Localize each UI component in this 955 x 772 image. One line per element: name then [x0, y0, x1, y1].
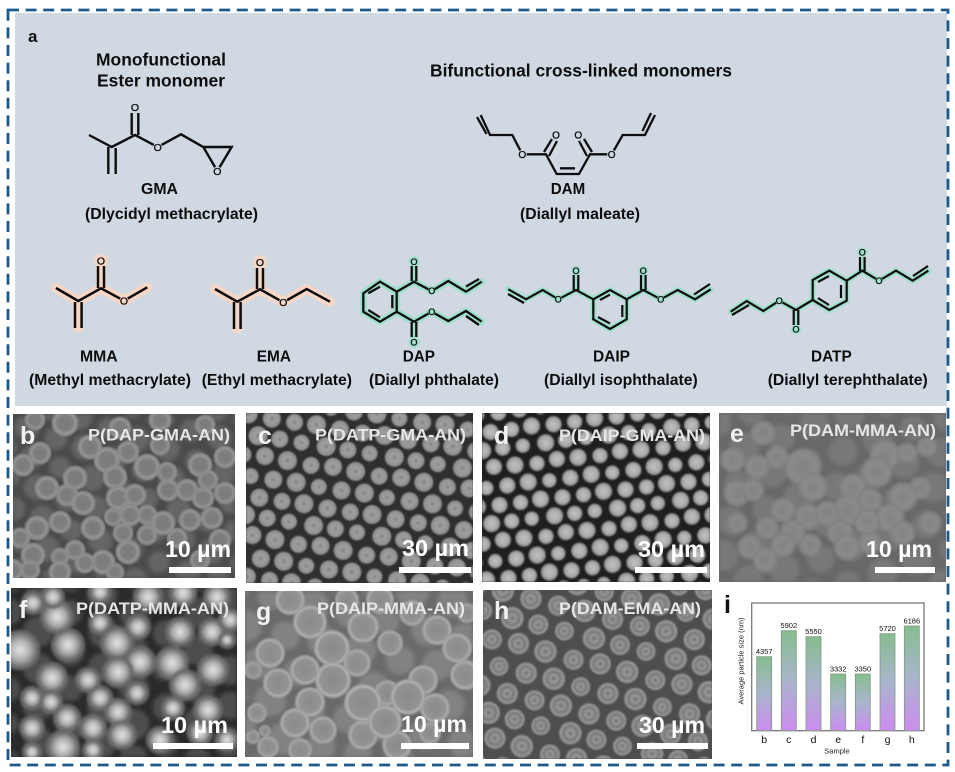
sample name d: P(DAIP-GMA-AN) — [559, 426, 705, 445]
label: DAP: (Diallyl phthalate) — [369, 372, 499, 389]
sample name g: P(DAIP-MMA-AN) — [317, 599, 465, 618]
structure: DAP — [363, 256, 482, 348]
structure: DAIP: O — [555, 294, 562, 304]
panel letter g: g — [256, 598, 271, 626]
heading: monofunctional ester monomer: Monofunctional — [96, 50, 226, 70]
label: GMA: (Dlycidyl methacrylate) — [85, 206, 258, 223]
structure: EMA — [215, 255, 330, 329]
panel letter i: i — [724, 591, 731, 619]
panel h: SEM P(DAM-EMA-AN) — [483, 590, 712, 759]
bars — [757, 626, 919, 731]
sample name h: P(DAM-EMA-AN) — [559, 599, 701, 618]
structure: DAP: O — [428, 286, 435, 296]
x axis ticks: d — [811, 734, 817, 746]
structure: DAP: O — [428, 307, 435, 317]
structure: DAIP: O — [640, 266, 647, 276]
scale bar e — [866, 536, 935, 573]
structure: DATP: O — [875, 276, 883, 286]
structure: GMA: O — [131, 102, 139, 114]
label: MMA: (Methyl methacrylate) — [29, 372, 191, 389]
bar values: 3350 — [854, 664, 871, 674]
label: DATP: DATP — [811, 348, 852, 366]
panel e: SEM P(DAM-MMA-AN) — [719, 413, 946, 582]
y axis title: Average particle size (nm) — [736, 617, 746, 704]
label: DAP: DAP — [403, 348, 435, 366]
structure: DAIP — [508, 266, 711, 329]
label: EMA — [202, 348, 352, 389]
label: GMA — [85, 181, 258, 223]
x axis ticks: g — [885, 734, 891, 746]
bar values: 3332 — [830, 664, 847, 674]
label: DATP — [768, 348, 928, 389]
bar values: 4357 — [756, 647, 773, 656]
scale bar c — [399, 535, 471, 573]
scale bar d: 30 µm — [638, 536, 705, 562]
label: MMA — [29, 348, 191, 389]
label: DAM: (Diallyl maleate) — [520, 206, 640, 223]
panel f: SEM P(DATP-MMA-AN) — [2, 581, 240, 762]
label: MMA: MMA — [80, 348, 118, 366]
structure: EMA: O — [279, 297, 287, 309]
scale bar f: 10 µm — [161, 712, 228, 738]
structure: DAM: O — [552, 130, 560, 142]
x axis ticks: b — [761, 734, 767, 746]
label: DAM: DAM — [551, 181, 585, 198]
heading: bifunctional cross-linked monomers: Bifunctional cross-linked monomers — [430, 60, 732, 80]
structure: DAIP: O — [657, 294, 664, 304]
sample name b: P(DAP-GMA-AN) — [88, 426, 230, 444]
scale bar h: 30 µm — [639, 712, 705, 738]
structure: GMA: O — [213, 166, 221, 178]
scale bar g — [401, 711, 469, 749]
scale bar g: 10 µm — [401, 711, 467, 737]
structure: GMA: O — [154, 142, 162, 154]
structure: DATP: O — [792, 324, 800, 334]
scale bar h — [637, 712, 708, 749]
label: DAM — [520, 181, 640, 223]
scale bar e: 10 µm — [866, 536, 932, 562]
structure: MMA: O — [120, 296, 128, 308]
bar values — [756, 616, 920, 674]
structure: DAM: O — [518, 150, 526, 161]
scale bar d — [635, 536, 707, 573]
structure: DAM — [477, 113, 655, 174]
panel letter f: f — [19, 596, 28, 624]
panel: monomer structures — [15, 13, 947, 406]
sample name f: P(DATP-MMA-AN) — [76, 599, 229, 618]
bar values: 6186 — [903, 616, 920, 626]
x axis ticks: c — [786, 734, 791, 746]
chart frame — [752, 603, 924, 731]
label: DAIP: DAIP — [593, 348, 630, 366]
panel i: bar chart of average particle size — [724, 591, 924, 756]
panel g: SEM P(DAIP-MMA-AN) — [245, 586, 479, 761]
panel letter d: d — [494, 422, 509, 450]
label: DAIP: (Diallyl isophthalate) — [544, 372, 698, 389]
structure: EMA: O — [256, 257, 264, 269]
panel letter e: e — [730, 420, 744, 448]
sample name e: P(DAM-MMA-AN) — [790, 421, 936, 440]
x axis ticks: f — [861, 734, 864, 746]
label: DATP: (Diallyl terephthalate) — [768, 372, 928, 389]
panel letter h: h — [494, 597, 509, 625]
label: EMA: (Ethyl methacrylate) — [202, 372, 352, 389]
structure: DAM: O — [574, 130, 582, 142]
label: GMA: GMA — [141, 181, 178, 198]
structure: DATP: O — [776, 296, 783, 306]
bar values: 5902 — [780, 621, 797, 630]
x axis ticks: e — [835, 734, 841, 746]
structure: DAP: O — [410, 338, 418, 348]
label: DAIP — [544, 348, 698, 389]
structure: MMA: O — [97, 256, 105, 268]
structure: DAM: O — [608, 150, 616, 161]
structure: DATP — [731, 247, 928, 334]
bar values: 5550 — [805, 627, 822, 636]
heading: monofunctional ester monomer: Ester monomer — [97, 70, 225, 90]
panel d: SEM P(DAIP-GMA-AN) — [482, 413, 710, 582]
structure: MMA — [56, 254, 147, 328]
panel c: SEM P(DATP-GMA-AN) — [246, 413, 473, 583]
x axis ticks — [761, 734, 915, 746]
heading: monofunctional ester monomer — [96, 50, 226, 90]
bar values: 5720 — [879, 624, 896, 633]
structure: DAP: O — [410, 257, 418, 267]
label: DAP — [369, 348, 499, 389]
sample name c: P(DATP-GMA-AN) — [315, 426, 466, 444]
panel b: SEM P(DAP-GMA-AN) — [2, 410, 235, 582]
label: EMA: EMA — [257, 348, 291, 366]
scale bar c: 30 µm — [402, 535, 469, 561]
structure: DATP: O — [859, 248, 866, 258]
scale bar b: 10 µm — [165, 536, 231, 562]
structure: GMA — [89, 102, 232, 178]
structure: DAIP: O — [572, 266, 580, 276]
scale bar b — [165, 536, 231, 573]
panel letter c: c — [258, 422, 272, 450]
x axis title: Sample — [824, 746, 850, 756]
scale bar f — [153, 712, 233, 749]
panel letter a: a — [28, 27, 38, 46]
x axis ticks: h — [909, 734, 915, 746]
panel letter b: b — [20, 422, 35, 450]
